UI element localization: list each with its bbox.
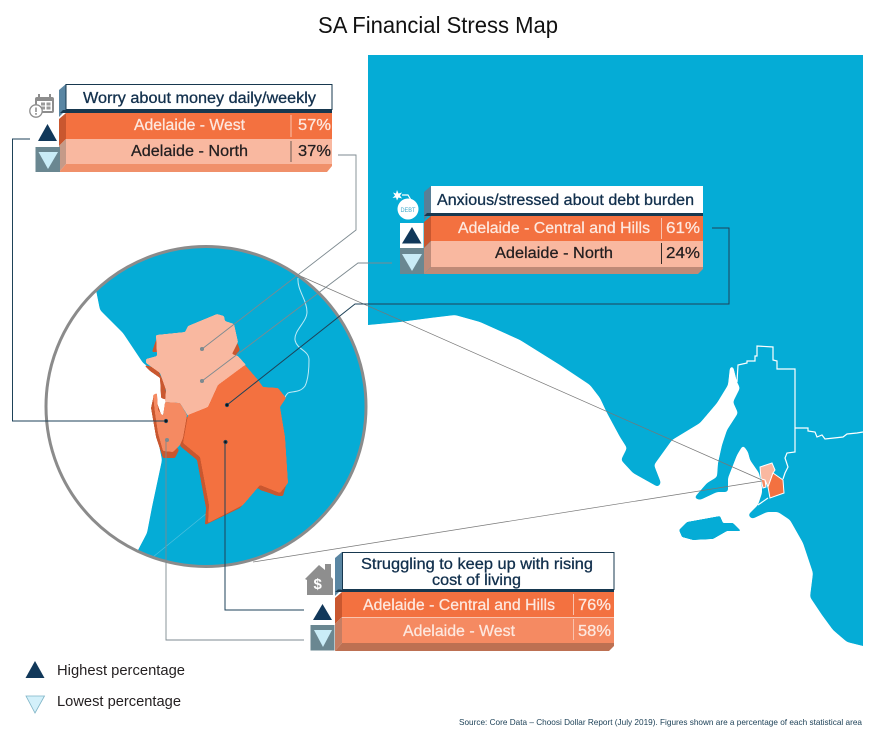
value: lowest: 24% [666,245,700,262]
value: lowest: 58% [578,623,611,640]
panel: worry about money [30,84,332,172]
main map: South Australia [355,40,876,650]
leader lines: highest values [12,139,729,610]
panel: cost of living [305,552,614,651]
icon: down triangle box [310,625,334,650]
inset: river [285,278,309,398]
circular inset map [44,245,368,568]
icon: house with dollar [305,564,333,595]
inset: water/land area [96,248,364,565]
zoom guide lines [253,275,762,562]
icon: bomb [392,190,418,220]
icon: down triangle box [36,147,60,172]
region shadows [144,335,287,525]
icon: bomb: DEBT [400,207,416,214]
heading line 2: cost of living [432,572,521,589]
heading: Struggling to keep up with rising [361,556,593,573]
value: highest: 57% [298,117,331,134]
map: island [679,516,741,540]
legend: highest label: Highest percentage [57,663,185,679]
icon: up triangle box [400,223,424,248]
legend: lowest label: Lowest percentage [57,694,181,710]
region: Adelaide - Central and Hills [183,365,288,523]
row: lowest: Adelaide - North [495,245,613,262]
heading: Anxious/stressed about debt burden [437,192,694,209]
icon: down triangle box [400,248,424,274]
legend [26,661,185,713]
icon: up triangle [313,604,332,620]
inset: faint guide [153,513,207,557]
icon: house with dollar: $ [314,576,322,593]
value: lowest: 37% [298,143,331,160]
map: Adelaide inset marker [760,463,784,498]
title: SA Financial Stress Map [318,12,558,38]
row: highest: Adelaide - Central and Hills [363,597,555,614]
region: Adelaide - West [153,393,187,452]
row: highest: Adelaide - Central and Hills [458,220,650,237]
row: lowest: Adelaide - North [131,143,248,160]
row: lowest: Adelaide - West [403,623,516,640]
map: state borders [737,346,863,505]
value: highest: 61% [666,220,700,237]
icon: up triangle [38,124,57,141]
legend: highest icon [26,661,44,678]
legend: lowest icon [26,696,44,713]
region: Adelaide - North [146,314,246,416]
heading: Worry about money daily/weekly [83,90,316,107]
value: highest: 76% [578,597,611,614]
panel: debt burden [392,186,703,274]
row: highest: Adelaide - West [134,117,246,134]
icon: calendar with alert [30,94,54,117]
source note: Source: Core Data – Choosi Dollar Report (July 2019). Figures shown are a percentage of each statistical area [459,717,862,727]
leader lines: lowest values [165,155,392,640]
